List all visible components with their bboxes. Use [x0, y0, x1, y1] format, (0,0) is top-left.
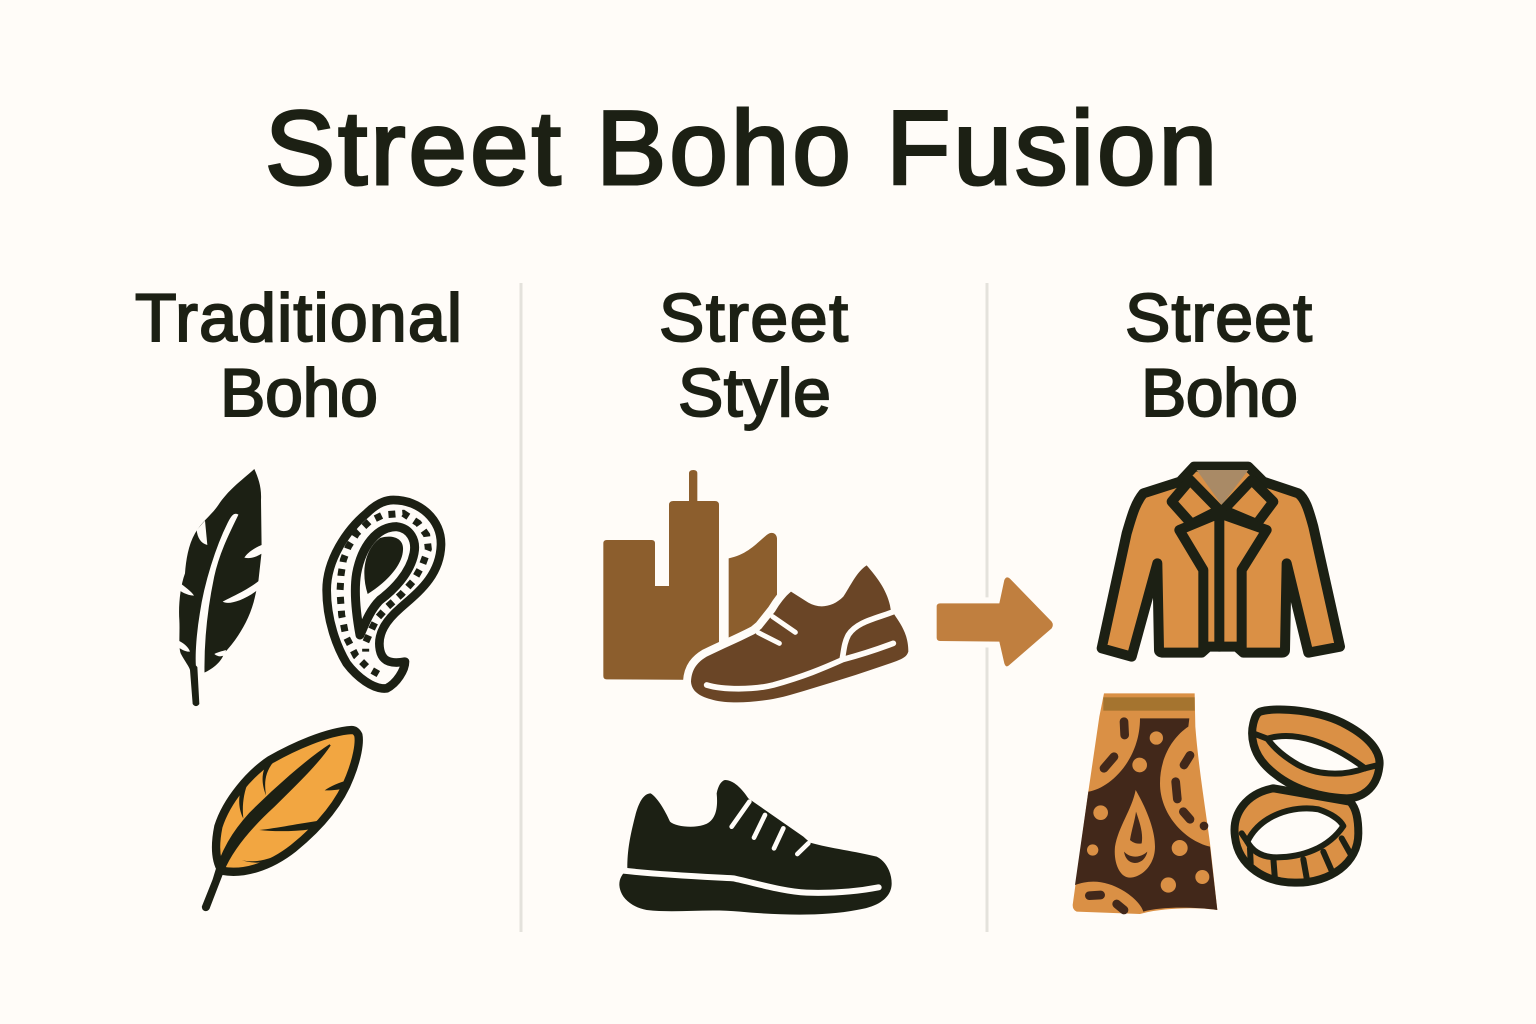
heading: traditional boho: Boho [220, 355, 378, 431]
icon: orange leaf [203, 730, 359, 910]
title: Street Boho Fusion [265, 90, 1217, 207]
icon: brown shoe [691, 565, 908, 702]
panel: street style [603, 280, 908, 915]
heading: street style: Style [678, 355, 831, 431]
icon: bangles [1235, 709, 1380, 883]
icon: black sneaker [619, 780, 892, 915]
panel: street boho [1073, 280, 1380, 914]
heading: traditional boho: Traditional [135, 280, 462, 356]
heading: street style [659, 280, 848, 431]
heading: street boho [1125, 280, 1312, 431]
arrow [937, 577, 1053, 666]
icon: paisley [327, 500, 441, 688]
icon: patterned skirt [1073, 693, 1217, 914]
icon: jacket [1102, 467, 1340, 657]
panel: traditional boho [135, 280, 462, 910]
heading: street style: Street [659, 280, 848, 356]
heading: traditional boho [135, 280, 462, 431]
icon: city buildings [603, 470, 777, 680]
heading: street boho: Street [1125, 280, 1312, 356]
heading: street boho: Boho [1141, 355, 1298, 431]
icon: black feather [176, 469, 264, 706]
